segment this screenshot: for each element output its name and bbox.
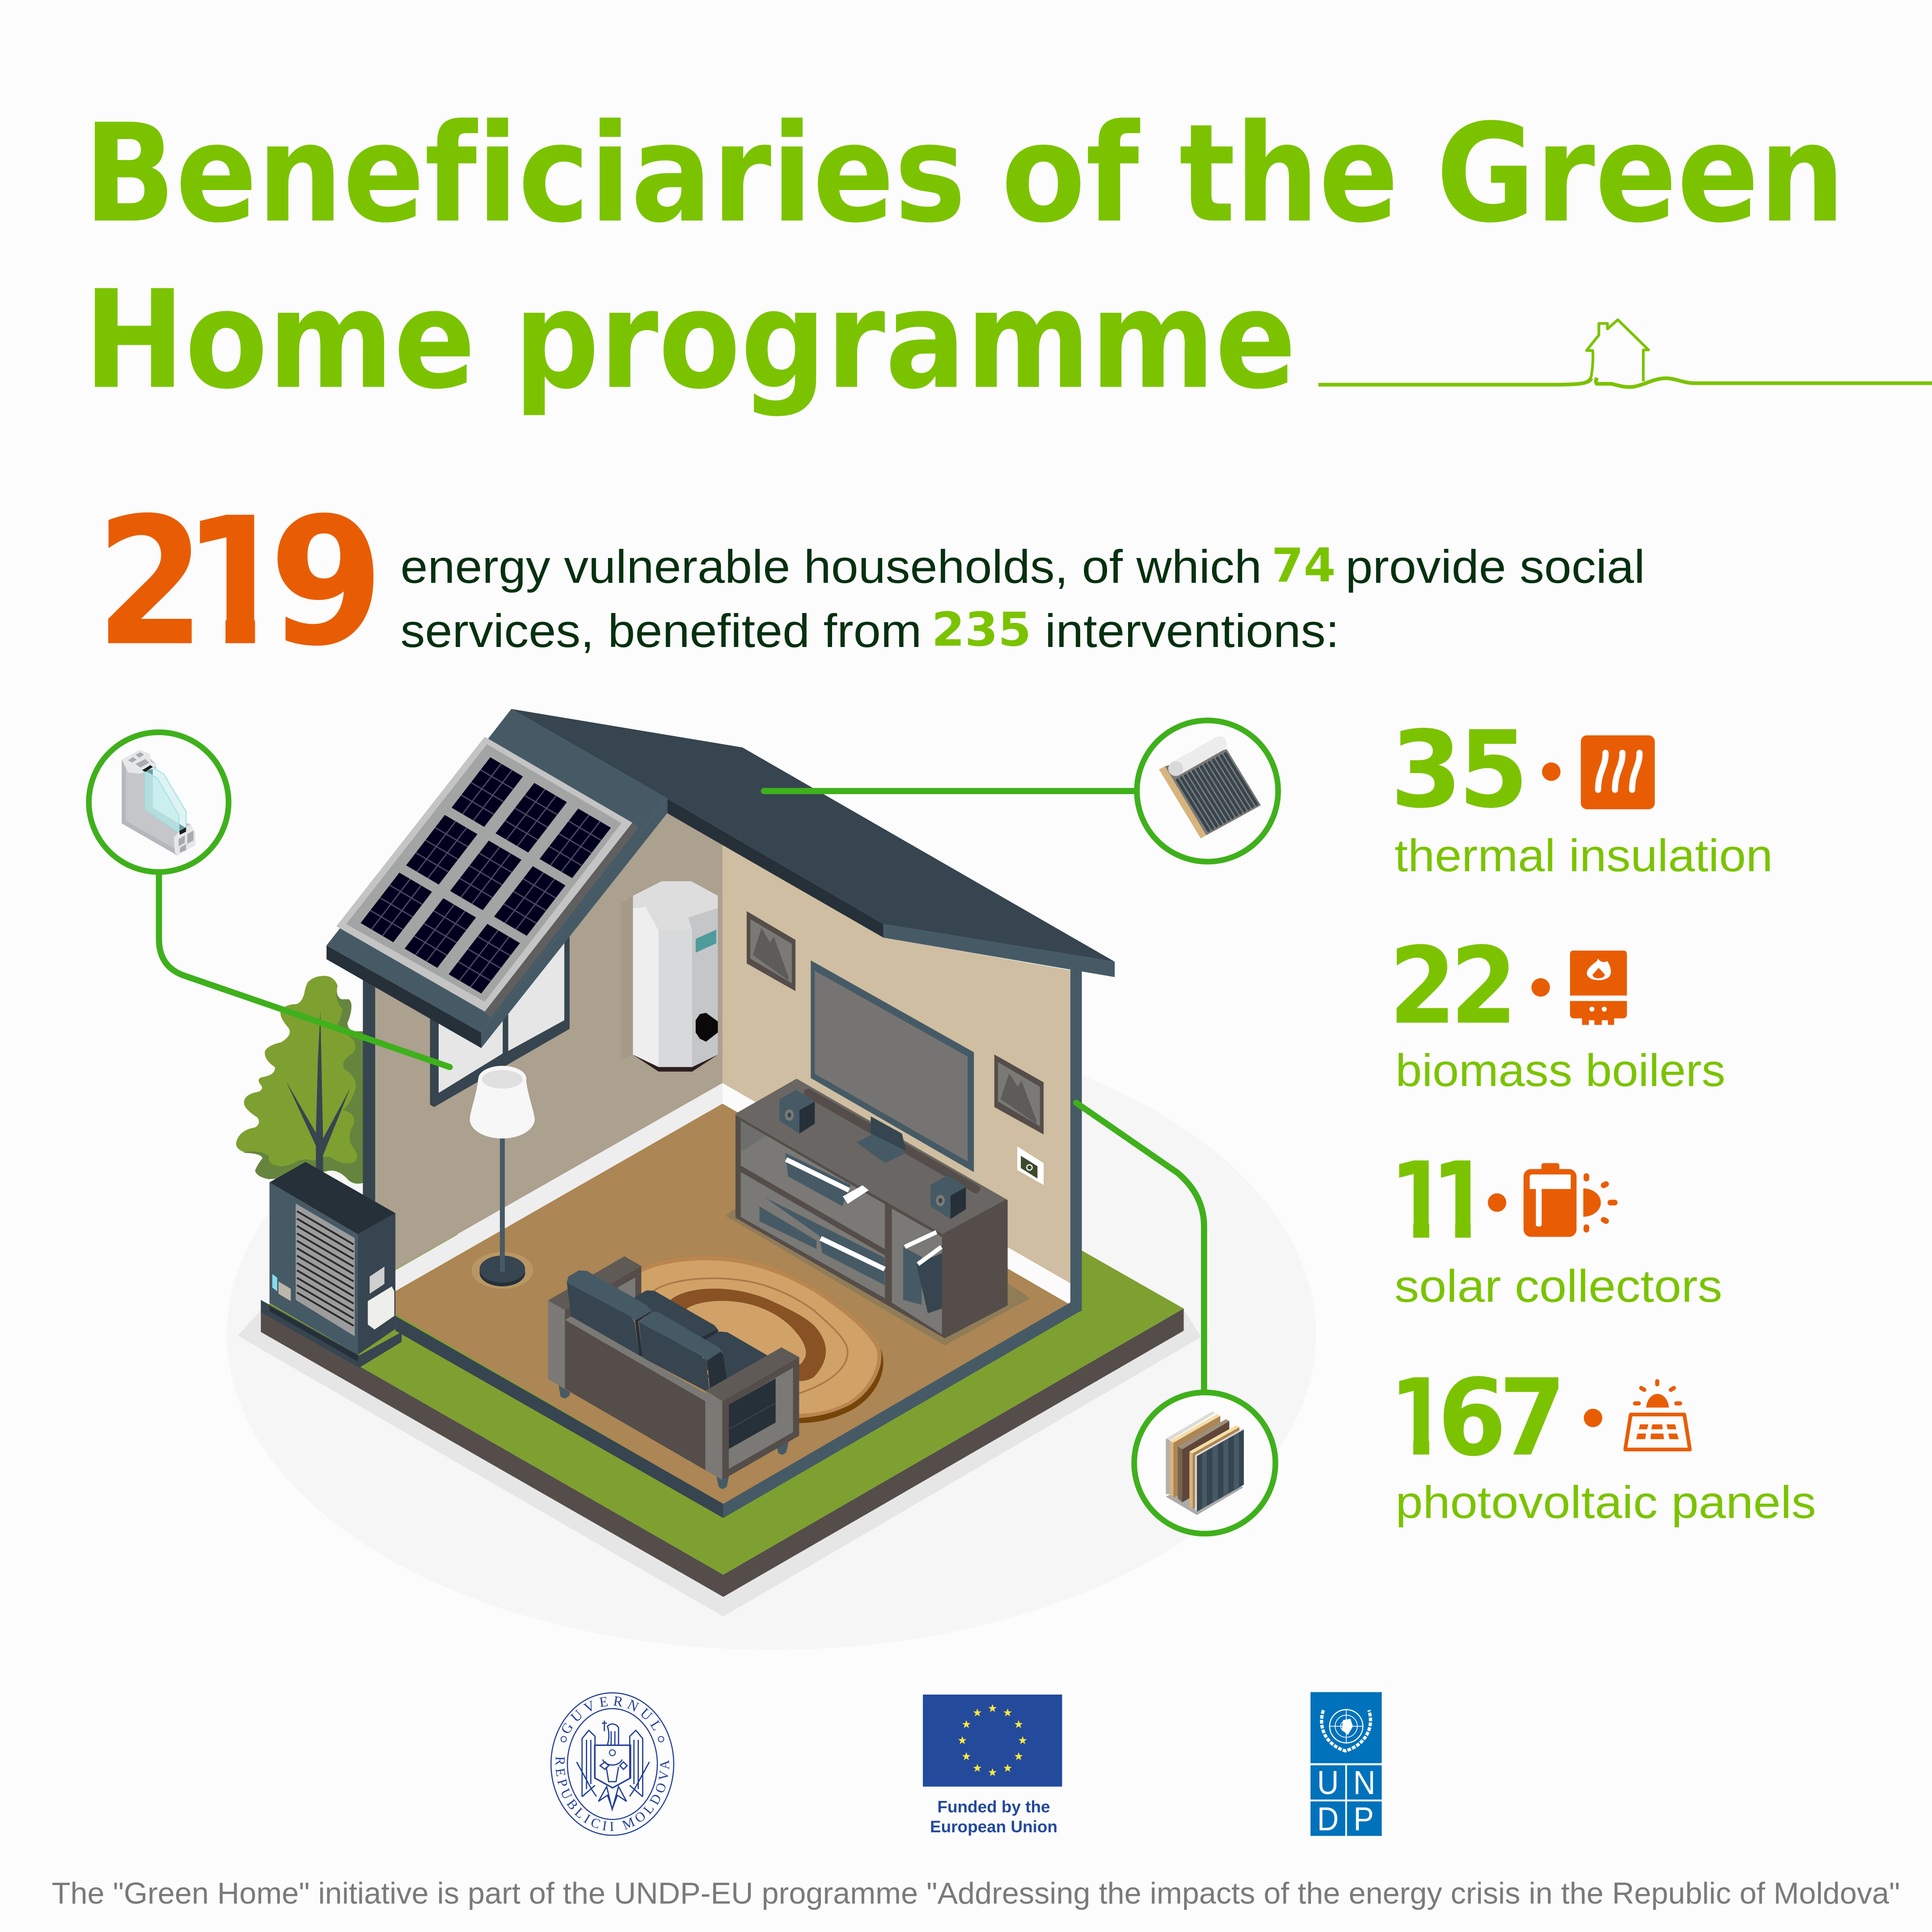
intro text — [401, 538, 1645, 657]
fan grille — [296, 1204, 355, 1336]
tree — [236, 976, 364, 1184]
stars — [958, 1704, 1027, 1776]
skirting boards — [376, 1083, 1070, 1305]
right wall — [723, 845, 1070, 1288]
stat: photovoltaic panels: 7 — [1499, 1356, 1566, 1480]
UNDP letter blocks: U — [1317, 1764, 1339, 1801]
logo: Government of Moldova seal: REPUBLICII MOLDOVA — [553, 1756, 672, 1834]
house illustration — [236, 709, 1201, 1617]
service boxes — [272, 1267, 394, 1329]
headline number 219: 2 — [96, 479, 205, 685]
far armrest — [548, 1256, 641, 1337]
logo: UNDP — [1311, 1692, 1382, 1838]
picture frame 2 — [994, 1054, 1044, 1134]
rug — [641, 1256, 883, 1423]
UNDP letter blocks: N — [1353, 1764, 1375, 1801]
books — [903, 1232, 942, 1313]
stat: photovoltaic panels — [1399, 1376, 1814, 1527]
window — [430, 893, 570, 1107]
icon: solar collector — [1159, 744, 1261, 838]
logo: EU flag — [923, 1695, 1062, 1836]
wall posts and floor edge — [363, 970, 1082, 1518]
icon: insulation layers — [1166, 1412, 1244, 1515]
legs — [558, 1385, 789, 1489]
ground platform — [238, 1232, 1201, 1617]
speakers — [779, 1090, 966, 1219]
intro text: provide social — [1345, 541, 1645, 593]
footer note: The "Green Home" initiative is part of the UNDP-EU programme "Addressing the impacts of the energy crisis in the Republic of Moldova" — [52, 1877, 1900, 1911]
title — [84, 95, 1845, 419]
stat: thermal insulation: 3 — [1390, 708, 1463, 832]
logo: Government of Moldova seal: GUVERNUL — [558, 1693, 667, 1737]
tv stand — [856, 1116, 906, 1163]
icon: heating — [1581, 736, 1655, 809]
callout: wall insulation — [1076, 1103, 1275, 1534]
thermostat — [1017, 1146, 1044, 1185]
funding label: European Union — [930, 1818, 1057, 1836]
UNDP letter blocks — [1311, 1764, 1382, 1838]
icon: solar collector tank — [1523, 1163, 1615, 1237]
UNDP letter blocks: D — [1317, 1801, 1339, 1838]
title: Home — [84, 262, 476, 419]
sofa — [548, 1256, 799, 1489]
stat: biomass boilers — [1389, 924, 1725, 1096]
title: Green — [1436, 95, 1845, 253]
stereo devices — [760, 1153, 885, 1285]
stat: biomass boilers: 2 — [1450, 924, 1518, 1048]
title: the — [1179, 95, 1399, 253]
television — [811, 960, 974, 1172]
stat: biomass boilers: biomass boilers — [1395, 1045, 1725, 1096]
title: Beneficiaries — [84, 95, 966, 253]
front cushions — [566, 1270, 727, 1393]
floor — [376, 1103, 1070, 1505]
headline number 219: 1 — [182, 479, 291, 685]
sofa back and side — [548, 1300, 706, 1470]
callout: window — [89, 732, 450, 1067]
intro text: interventions: — [1045, 605, 1339, 657]
wall-mounted water tank — [621, 881, 718, 1072]
headline number 219 — [108, 512, 374, 646]
heat pump outdoor unit — [261, 1162, 402, 1368]
title: of — [1001, 95, 1141, 253]
left wall — [375, 813, 723, 1281]
title: programme — [514, 262, 1296, 419]
roof — [326, 709, 1115, 1048]
rear cushions — [634, 1290, 767, 1379]
stat: solar collectors: solar collectors — [1395, 1260, 1722, 1311]
stat: photovoltaic panels: 1 — [1390, 1356, 1449, 1480]
solar panel array — [336, 737, 638, 1018]
funding label — [930, 1798, 1057, 1836]
funding label: Funded by the — [937, 1798, 1050, 1816]
stat: thermal insulation: 5 — [1459, 708, 1529, 832]
stat: biomass boilers: 2 — [1389, 924, 1456, 1048]
stat: photovoltaic panels: photovoltaic panels — [1395, 1477, 1816, 1528]
UNDP letter blocks: P — [1353, 1801, 1374, 1838]
UN emblem — [1322, 1709, 1370, 1751]
stat: solar collectors — [1390, 1139, 1722, 1311]
callout: solar collector — [764, 720, 1278, 862]
logo: Government of Moldova seal — [551, 1693, 674, 1835]
icon: window profile — [122, 750, 195, 855]
icon: boiler — [1570, 951, 1627, 1025]
intro text: 74 — [1272, 538, 1336, 593]
stat: thermal insulation: thermal insulation — [1395, 830, 1773, 881]
stat: solar collectors: 1 — [1390, 1139, 1449, 1263]
background ellipse — [227, 1019, 1316, 1650]
floor lamp — [470, 1066, 535, 1289]
stat: thermal insulation — [1390, 708, 1773, 881]
decorative house line — [1319, 320, 1932, 387]
intro text: services, benefited from — [401, 605, 922, 657]
stat: photovoltaic panels: 6 — [1437, 1356, 1506, 1480]
stat: solar collectors: 1 — [1431, 1139, 1490, 1263]
headline number 219: 9 — [269, 479, 384, 685]
media shelf — [725, 1080, 1030, 1345]
picture frame 1 — [747, 911, 795, 991]
icon: photovoltaic panel — [1625, 1381, 1690, 1450]
intro text: 235 — [931, 602, 1032, 657]
near armrest — [706, 1347, 799, 1480]
intro text: energy vulnerable households, of which — [401, 541, 1262, 593]
